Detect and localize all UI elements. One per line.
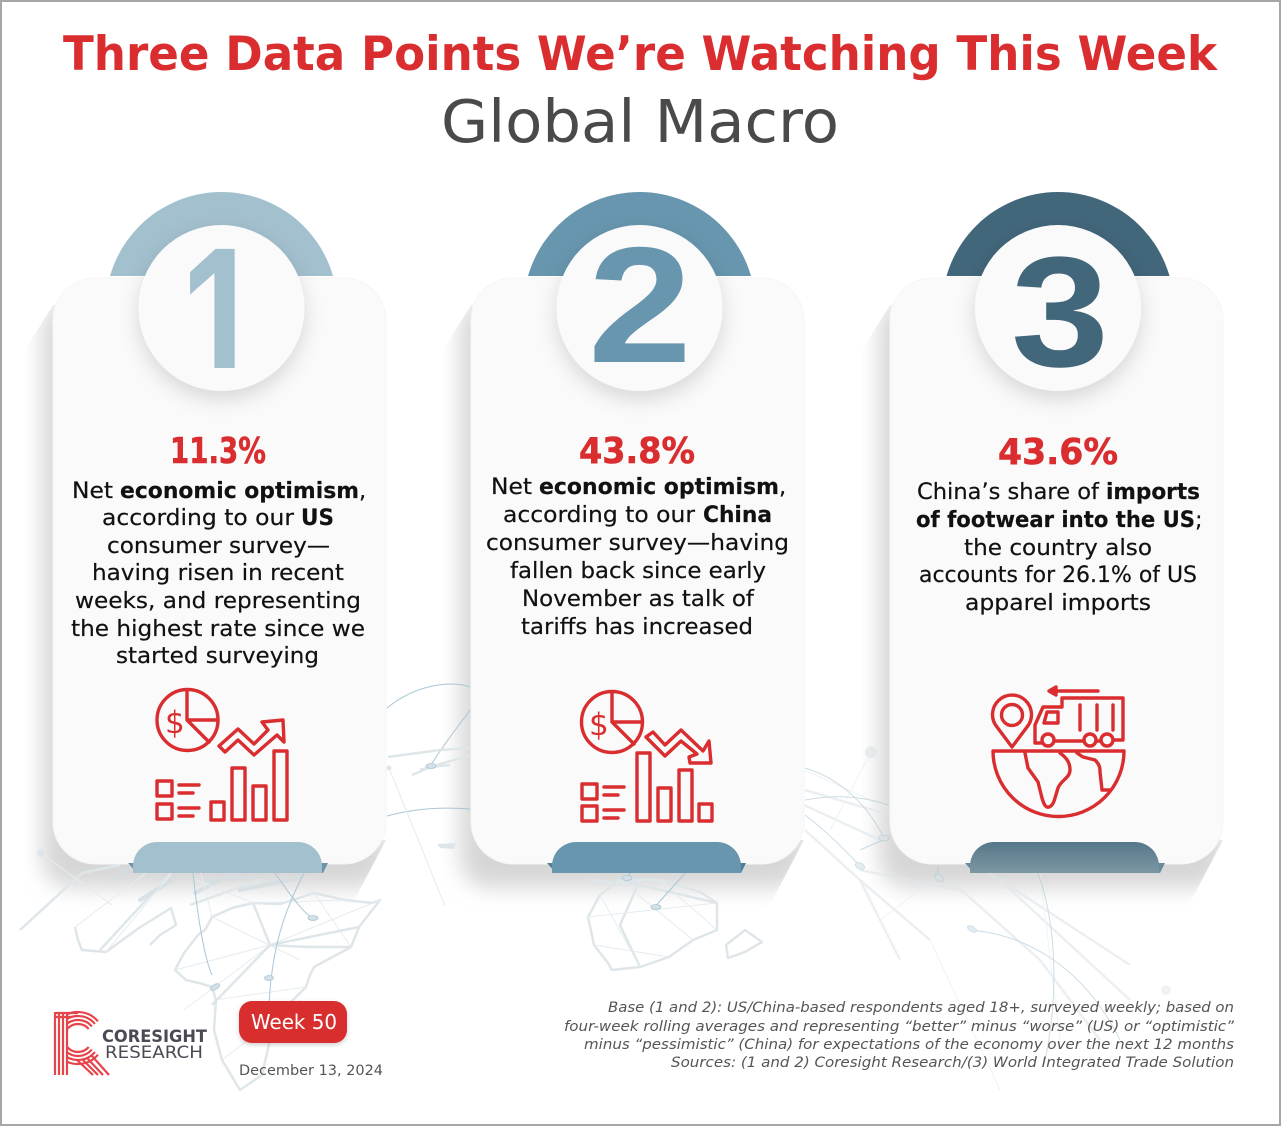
- card 1 description: started surveying: [116, 643, 319, 669]
- week badge: Week 50: [251, 1010, 337, 1034]
- date: December 13, 2024: [239, 1063, 383, 1079]
- background world map: [20, 684, 1171, 1090]
- card 2 description: according to our: [503, 502, 696, 528]
- card 3 description: the country also: [964, 535, 1152, 561]
- week badge: [239, 1001, 347, 1043]
- title: Three Data Points We’re Watching This Week: [63, 27, 1219, 82]
- card 2 description: November as talk of: [522, 586, 755, 612]
- card 1 body: [53, 278, 386, 864]
- icon: pie chart with rising arrow and bars: $: [165, 705, 185, 741]
- logo: Coresight Research: RESEARCH: [105, 1043, 203, 1063]
- panel: card 2: [471, 192, 804, 873]
- card 1 description: US: [301, 505, 334, 531]
- logo: Coresight Research: [52, 1012, 207, 1075]
- card 3 description: apparel imports: [965, 590, 1151, 616]
- card 2 number badge: 2: [588, 213, 692, 397]
- card 1 description: [71, 478, 366, 669]
- card 3 description: accounts for 26.1% of US: [919, 562, 1197, 588]
- card 1 description: having risen in recent: [92, 560, 344, 586]
- card 3 description: [916, 479, 1203, 616]
- map: centre landmass: [588, 873, 762, 970]
- map: right landmass: [804, 746, 1171, 1090]
- card 1 description: consumer survey—: [107, 533, 330, 559]
- card 3 tab: [965, 842, 1165, 873]
- card 1 description: weeks, and representing: [75, 588, 361, 614]
- card 3 description: ;: [1195, 507, 1203, 533]
- card 3 description: of footwear into the US: [916, 507, 1195, 533]
- footnote: base and sources: Sources: (1 and 2) Coresight Research/(3) World Integrated Trade Solution: [671, 1055, 1234, 1071]
- card 2 description: ,: [779, 474, 786, 500]
- card 3 number badge: [975, 225, 1141, 400]
- card 2 description: [486, 474, 789, 640]
- card 3 arc: [946, 192, 1170, 276]
- card 1 description: according to our: [102, 505, 295, 531]
- card 2 number badge: [556, 213, 722, 397]
- logo wordmark: CORESIGHT: [102, 1027, 207, 1047]
- footnote: base and sources: [564, 1000, 1235, 1071]
- panel: card 1: [53, 192, 386, 873]
- icon: pie chart with rising arrow and bars: [157, 690, 287, 820]
- icon: pie chart with falling arrow and bars: $: [589, 707, 609, 743]
- card 2 body: [471, 278, 804, 864]
- card 1 number badge: 1: [180, 205, 262, 437]
- card 2 arc: [528, 192, 751, 276]
- card 1 statistic: 11.3%: [170, 431, 266, 472]
- card 3 description: China’s share of: [917, 479, 1100, 505]
- footnote: base and sources: Base (1 and 2): US/China-based respondents aged 18+, surveyed weekly; based on: [608, 1000, 1234, 1016]
- card 1 description: Net: [72, 478, 113, 504]
- card 3 statistic: 43.6%: [998, 432, 1118, 473]
- card 2 description: economic optimism: [539, 474, 779, 500]
- card long shadows: [42, 300, 1224, 888]
- subtitle: Global Macro: [441, 87, 839, 156]
- card 2 description: consumer survey—having: [486, 530, 789, 556]
- map: left landmass: [20, 849, 380, 1090]
- card 1 description: economic optimism: [120, 478, 359, 504]
- card 2 description: tariffs has increased: [521, 614, 753, 640]
- logo mark: [52, 1012, 109, 1075]
- card 2 tab: [547, 842, 746, 873]
- card 2 statistic: 43.8%: [579, 431, 695, 472]
- card 1 tab: [128, 842, 328, 873]
- card 1 arc: [110, 192, 333, 276]
- card 2 description: Net: [491, 474, 532, 500]
- card 1 description: the highest rate since we: [71, 616, 365, 642]
- icon: globe with truck and location pin: [992, 687, 1124, 816]
- map: fragments between cards: [386, 684, 471, 906]
- footnote: base and sources: minus “pessimistic” (China) for expectations of the economy over the next 12 months: [584, 1037, 1234, 1053]
- card 3 number badge: 3: [1011, 225, 1109, 400]
- card 1 description: ,: [359, 478, 366, 504]
- icon: pie chart with falling arrow and bars: [582, 692, 712, 821]
- card 3 body: [890, 278, 1223, 864]
- card 1 number badge: [132, 225, 311, 406]
- panel: card 3: [890, 192, 1223, 873]
- card 2 description: China: [703, 502, 772, 528]
- footnote: base and sources: four-week rolling averages and representing “better” minus “worse” (US) or “optimistic”: [564, 1019, 1235, 1035]
- card 2 description: fallen back since early: [510, 558, 766, 584]
- card 3 description: imports: [1106, 479, 1200, 505]
